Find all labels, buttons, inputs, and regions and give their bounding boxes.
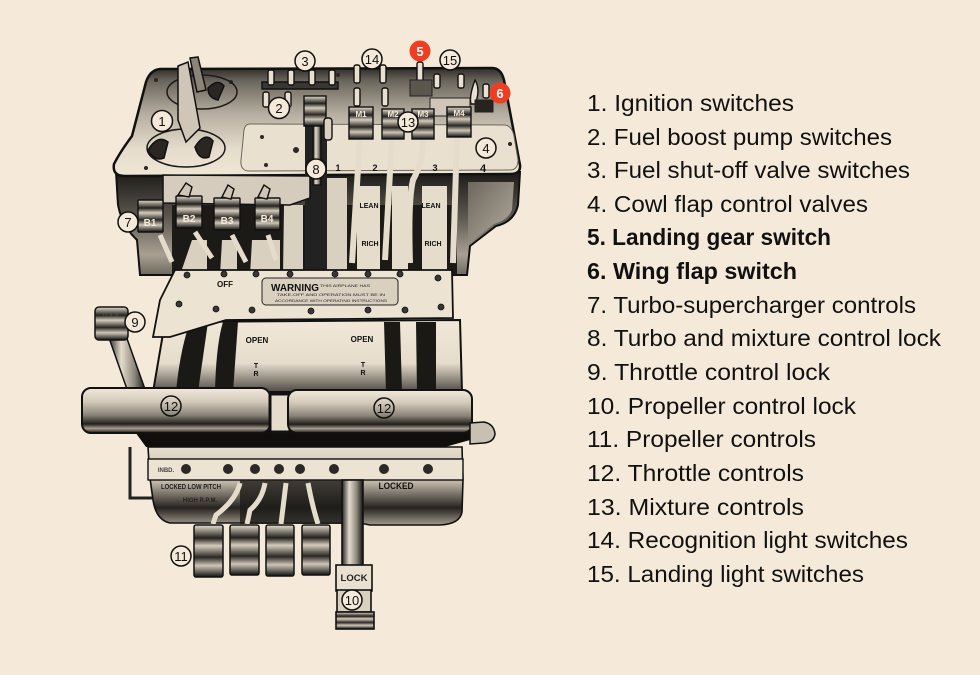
callout 11: 11 bbox=[174, 549, 188, 564]
callout 7: 7 bbox=[124, 215, 132, 230]
callout 14 bbox=[362, 49, 382, 69]
callout 7 bbox=[118, 212, 138, 232]
knob labels B: B2 bbox=[183, 214, 196, 225]
callout 6 bbox=[490, 82, 510, 104]
plate side labels: LEAN bbox=[359, 203, 379, 210]
legend item 14: 14. Recognition light switches bbox=[587, 527, 908, 553]
plate side labels bbox=[335, 163, 487, 248]
callout 9 bbox=[125, 312, 145, 332]
turbo lever stems bbox=[160, 232, 276, 262]
callout 12 left: 12 bbox=[164, 399, 178, 414]
block labels: T bbox=[254, 363, 259, 370]
ignition lever bbox=[148, 57, 224, 159]
mixture knobs M1-M4 bbox=[349, 107, 471, 263]
warning placard: THIS AIRPLANE HAS bbox=[320, 283, 370, 288]
block labels: R bbox=[253, 371, 259, 378]
throttle block bbox=[153, 320, 462, 392]
callout 3 bbox=[295, 51, 315, 71]
knob labels M: M2 bbox=[387, 110, 399, 119]
knob labels M: M4 bbox=[453, 109, 465, 118]
callout 13: 13 bbox=[401, 115, 415, 130]
block labels: OPEN bbox=[246, 336, 269, 345]
legend item 12: 12. Throttle controls bbox=[587, 460, 804, 486]
callout 12 left bbox=[161, 396, 181, 416]
knob labels B: B4 bbox=[261, 214, 274, 225]
callout 4 bbox=[476, 138, 496, 158]
knob labels M: M3 bbox=[417, 110, 429, 119]
housing labels bbox=[161, 481, 414, 504]
callout 10 bbox=[342, 590, 362, 610]
plate side labels: 4 bbox=[480, 163, 487, 175]
callout 5: 5 bbox=[416, 44, 424, 59]
warning placard: TAKE-OFF AND OPERATION MUST BE IN bbox=[277, 292, 385, 297]
plate side labels: 3 bbox=[432, 163, 438, 173]
ratchet at left bbox=[130, 447, 152, 498]
plate side labels: 2 bbox=[372, 163, 378, 173]
callout 2 bbox=[268, 98, 290, 118]
throttle handle center link bbox=[270, 394, 290, 432]
screw strip bbox=[148, 459, 463, 480]
housing labels: LOCKED bbox=[378, 481, 414, 491]
throttle handle right bbox=[288, 390, 472, 433]
plate side labels: 1 bbox=[335, 163, 341, 173]
lever 9 arm: LOCK bbox=[103, 313, 119, 319]
top panel bbox=[114, 68, 520, 176]
ignition switch dials bbox=[147, 75, 237, 167]
throttle slots bbox=[176, 322, 436, 392]
callout 4: 4 bbox=[482, 141, 490, 156]
legend item 4: 4. Cowl flap control valves bbox=[587, 191, 868, 217]
center gap in housing bbox=[240, 480, 345, 524]
legend item 9: 9. Throttle control lock bbox=[587, 359, 830, 385]
plate side labels: LEAN bbox=[421, 203, 441, 210]
engine plate bbox=[241, 124, 518, 171]
legend item 7: 7. Turbo-supercharger controls bbox=[587, 292, 916, 318]
warning plate bbox=[153, 270, 453, 337]
plate side labels: RICH bbox=[361, 241, 379, 248]
warning placard: ACCORDANCE WITH OPERATING INSTRUCTIONS bbox=[275, 298, 387, 303]
propeller stems bbox=[213, 483, 318, 524]
lock knob 8 bbox=[304, 96, 332, 270]
callout 14: 14 bbox=[365, 52, 379, 67]
lower bar and housing bbox=[148, 447, 463, 525]
block labels: R bbox=[360, 370, 366, 377]
legend item 3: 3. Fuel shut-off valve switches bbox=[587, 157, 910, 183]
knob labels B: B3 bbox=[221, 216, 234, 227]
knob labels M bbox=[355, 109, 465, 119]
knob labels B: B1 bbox=[144, 218, 157, 229]
legend item 11: 11. Propeller controls bbox=[587, 426, 816, 452]
legend item 1: 1. Ignition switches bbox=[587, 90, 794, 116]
propeller lock rod bbox=[342, 480, 363, 568]
callout 2: 2 bbox=[275, 101, 283, 116]
callout 10: 10 bbox=[345, 593, 359, 608]
callout 5 bbox=[410, 40, 430, 62]
screw strip: INBD. bbox=[158, 468, 174, 474]
knob labels M: M1 bbox=[355, 110, 367, 119]
callout 9: 9 bbox=[131, 315, 139, 330]
propeller lock handle bbox=[336, 565, 374, 629]
panel screws bbox=[144, 73, 512, 170]
callout 6: 6 bbox=[496, 86, 504, 101]
callout 3: 3 bbox=[301, 54, 309, 69]
end bolt bbox=[470, 422, 495, 444]
callout 1: 1 bbox=[158, 114, 166, 129]
screws on plate bbox=[176, 271, 444, 314]
toggle switches bbox=[262, 62, 489, 107]
legend item 15: 15. Landing light switches bbox=[587, 561, 864, 587]
block labels bbox=[217, 280, 374, 378]
legend item 2: 2. Fuel boost pump switches bbox=[587, 124, 892, 150]
propeller lock handle: LOCK bbox=[341, 573, 368, 584]
callout 15 bbox=[440, 50, 460, 70]
callout 8 bbox=[306, 159, 326, 179]
plate side labels: RICH bbox=[424, 241, 442, 248]
callout 1 bbox=[152, 110, 172, 132]
chute panels with slots bbox=[172, 178, 457, 275]
callout numbers bbox=[118, 40, 510, 610]
callout 12 right: 12 bbox=[377, 401, 391, 416]
callout 11 bbox=[171, 546, 191, 566]
legend item 10: 10. Propeller control lock bbox=[587, 393, 856, 419]
throttle handle left bbox=[82, 388, 270, 433]
legend item 13: 13. Mixture controls bbox=[587, 494, 804, 520]
lever 9 arm bbox=[95, 307, 146, 392]
turbo knobs B1-B4 bbox=[138, 183, 280, 232]
legend item 6: 6. Wing flap switch bbox=[587, 258, 797, 284]
legend item 5: 5. Landing gear switch bbox=[587, 224, 831, 250]
warning placard: WARNING bbox=[271, 282, 319, 294]
propeller knobs bbox=[194, 525, 330, 577]
knob labels B bbox=[144, 214, 274, 229]
housing right side shading bbox=[468, 182, 514, 244]
turbo plate bbox=[163, 175, 310, 205]
warning placard bbox=[262, 278, 398, 305]
placards bbox=[410, 80, 493, 116]
illustration: throttle quadrant control stand bbox=[82, 57, 520, 629]
legend item 8: 8. Turbo and mixture control lock bbox=[587, 325, 941, 351]
block labels: OPEN bbox=[351, 335, 374, 344]
legend list bbox=[587, 90, 941, 587]
callout 13 bbox=[398, 112, 418, 132]
callout 12 right bbox=[374, 398, 394, 418]
under-handle dark band bbox=[130, 425, 470, 447]
callout 8: 8 bbox=[312, 162, 320, 177]
housing labels: HIGH R.P.M. bbox=[183, 498, 217, 504]
block labels: OFF bbox=[217, 280, 233, 289]
callout 15: 15 bbox=[443, 53, 457, 68]
lower housing box bbox=[116, 172, 520, 275]
block labels: T bbox=[361, 362, 366, 369]
housing labels: LOCKED LOW PITCH bbox=[161, 484, 221, 491]
